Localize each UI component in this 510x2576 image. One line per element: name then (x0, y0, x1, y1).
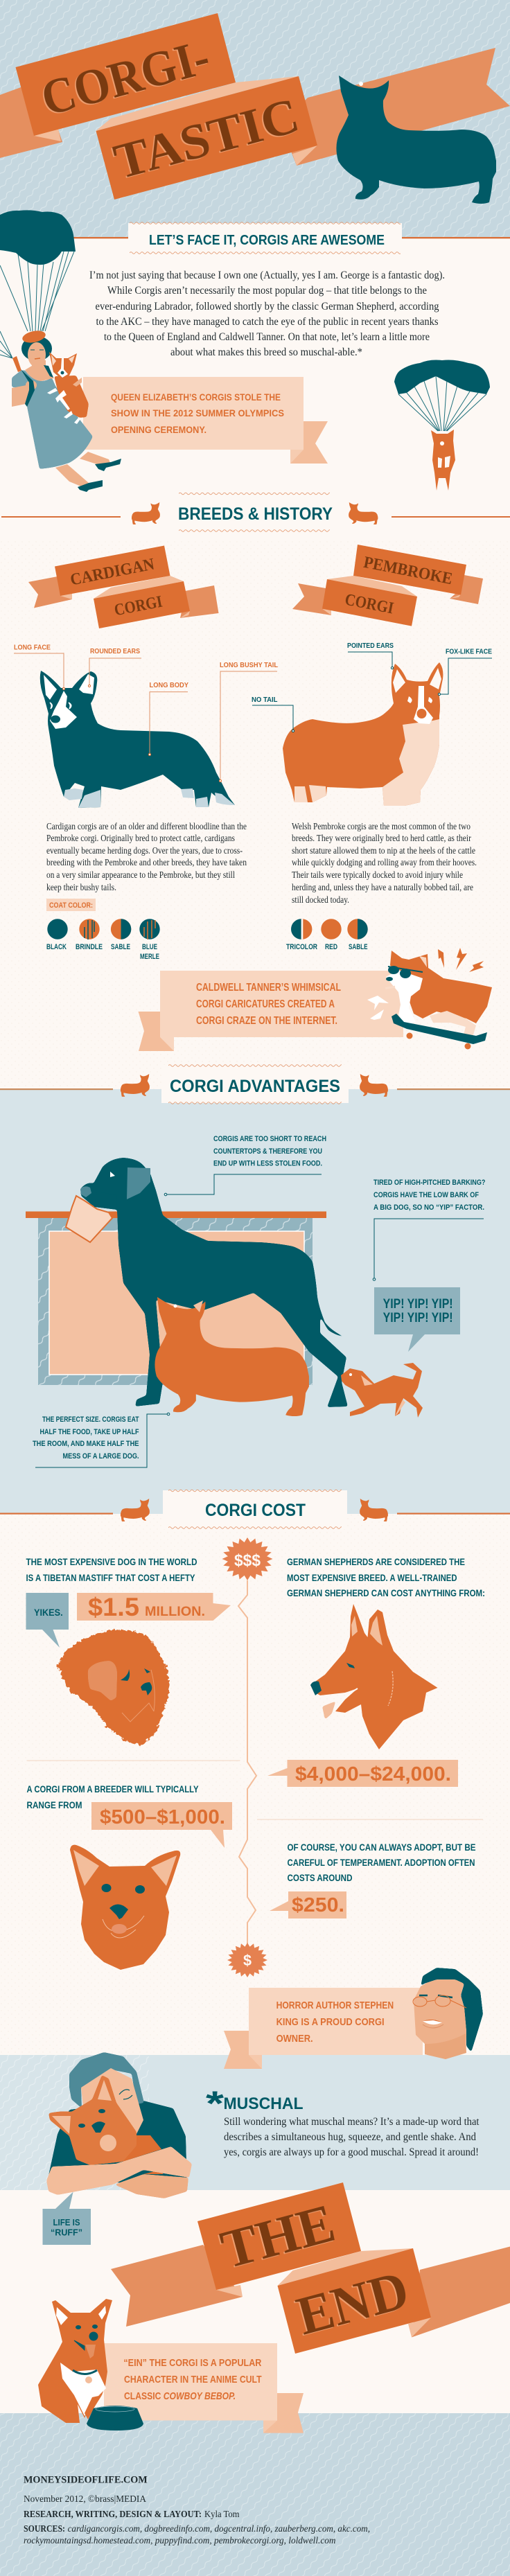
legend: Cardigan coat colors: BLUE (142, 943, 157, 951)
price tag: breeder range: $500–$1,000. (100, 1806, 225, 1828)
text: most expensive dog: THE MOST EXPENSIVE DOG IN THE WORLD (26, 1557, 197, 1567)
speech bubble: life is ruff (43, 2192, 91, 2245)
title word: Tastic: TASTIC (108, 87, 305, 190)
icon: large corgi silhouette (336, 76, 496, 204)
arms (46, 2146, 192, 2198)
callouts: pembroke features: NO TAIL (252, 696, 277, 704)
text: Pembroke description: short stature allowed them to nip at the heels of the cattle (292, 845, 475, 856)
text: corgi from a breeder (26, 1784, 198, 1810)
text: Pembroke description: still docked today. (292, 894, 349, 905)
callout: Caldwell Tanner: CALDWELL TANNER’S WHIMSICAL (196, 982, 341, 994)
callout: stolen food: CORGIS ARE TOO SHORT TO REACH (213, 1135, 326, 1143)
callout: barking: TIRED OF HIGH-PITCHED BARKING? (373, 1179, 486, 1187)
legend: Pembroke coat colors: RED (325, 943, 337, 951)
illustration: Ein the corgi with bowl (38, 2299, 143, 2431)
text: Cardigan description: Pembroke corgi. Originally bred to protect cattle, cardigans (46, 833, 235, 843)
text and illustration: German shepherd (287, 1557, 485, 1749)
callout: perfect size: HALF THE FOOD, TAKE UP HALF (40, 1428, 139, 1436)
callout: Stephen King: KING IS A PROUD CORGI (276, 2016, 385, 2028)
ribbon: Pembroke corgi (292, 545, 483, 626)
arm, straps and head (12, 329, 53, 407)
footer credits: SOURCES: (24, 2523, 65, 2534)
heading: breeds and history: BREEDS & HISTORY (178, 504, 333, 524)
text: Cardigan description: keep their bushy tails. (46, 882, 116, 892)
callout: Ein: “EIN” THE CORGI IS A POPULAR (123, 2357, 262, 2369)
callouts: pembroke features: POINTED EARS (347, 642, 394, 650)
callout: stolen food: COUNTERTOPS & THEREFORE YOU (213, 1147, 322, 1156)
price tag: 1.5 million: MILLION. (145, 1605, 205, 1619)
speech bubble: yikes: YIKES. (34, 1607, 63, 1618)
text: most expensive dog: IS A TIBETAN MASTIFF THAT COST A HEFTY (26, 1573, 195, 1583)
text and tag: adoption: CAREFUL OF TEMPERAMENT. ADOPTION OFTEN (287, 1858, 475, 1868)
intro paragraph: about what makes this breed so muschal-able.* (170, 346, 362, 358)
illustration: kitchen counter (26, 1211, 326, 1385)
intro paragraph: to the AKC – they have managed to catch the eye of the public in recent years thanks (96, 316, 438, 328)
callout: barking (373, 1179, 486, 1280)
heading: corgi advantages (0, 1064, 510, 1104)
callout: perfect size: THE ROOM, AND MAKE HALF THE (33, 1440, 139, 1448)
burst: single dollar: $ (243, 1952, 252, 1969)
callout: barking: A BIG DOG, SO NO “YIP” FACTOR. (373, 1203, 484, 1212)
callouts: cardigan features: ROUNDED EARS (90, 648, 140, 655)
price tag: 1.5 million (77, 1593, 231, 1621)
text and tag: adoption: COSTS AROUND (287, 1873, 353, 1883)
speech bubble: yip: YIP! YIP! YIP! (383, 1297, 453, 1312)
legs and shoes (55, 452, 121, 492)
illustration: corgi parachuting (394, 360, 490, 491)
callout: stolen food: END UP WITH LESS STOLEN FOOD. (213, 1160, 322, 1168)
heading: let's face it (0, 222, 510, 255)
callout: Ein (104, 2343, 304, 2433)
callout: Queen Elizabeth: OPENING CEREMONY. (111, 424, 206, 435)
definition: muschal (206, 2084, 480, 2158)
text and tag: adoption (270, 1842, 475, 1918)
text and illustration: German shepherd: GERMAN SHEPHERDS ARE CONSIDERED THE (287, 1557, 465, 1567)
callout: Stephen King (224, 1988, 423, 2069)
illustration: Queen parachuting with corgi (0, 210, 121, 492)
illustration: barking chihuahua (341, 1363, 423, 1418)
callout: Ein: CHARACTER IN THE ANIME CULT (124, 2374, 262, 2385)
price tag: 250: $250. (292, 1894, 344, 1916)
illustration: skateboarding corgi (367, 948, 492, 1049)
hair and face (69, 2052, 144, 2134)
callouts: pembroke features (252, 642, 492, 732)
intro paragraph (89, 270, 445, 358)
text: Pembroke description (292, 821, 477, 905)
text: Cardigan description: on a very similar appearance to the Pembroke, but they still (46, 870, 235, 880)
legend: Pembroke coat colors (286, 919, 368, 951)
callout: Stephen King: OWNER. (276, 2033, 313, 2045)
text: Cardigan description (46, 821, 247, 892)
illustration: corgi head (70, 1845, 180, 1970)
ribbon: Cardigan corgi: CARDIGAN (69, 555, 157, 589)
text: Pembroke description: Welsh Pembroke corgis are the most common of the two (292, 821, 471, 831)
callout: perfect size (33, 1413, 170, 1467)
legend: Cardigan coat colors: COAT COLOR: (49, 901, 93, 910)
divider lines (26, 1760, 483, 1820)
title banner: Corgi-tastic (0, 13, 510, 200)
callout: Ein: CLASSIC COWBOY BEBOP. (124, 2390, 236, 2402)
neck and chest (25, 360, 54, 382)
intro paragraph: ever-enduring Labrador, followed shortly by the classic German Shepherd, according (96, 301, 439, 312)
callouts: cardigan features: LONG FACE (14, 644, 51, 651)
dress (12, 370, 93, 469)
text and tag: adoption: OF COURSE, YOU CAN ALWAYS ADOPT, BUT BE (287, 1842, 475, 1853)
heading: corgi cost: CORGI COST (205, 1501, 306, 1520)
illustration: Pembroke corgi with labels (252, 642, 492, 806)
intro paragraph: I’m not just saying that because I own one (Actually, yes I am. George is a fantastic dog). (89, 270, 445, 281)
illustration: Stephen King portrait (413, 1968, 483, 2059)
definition: muschal: Still wondering what muschal means? It’s a made-up word that (224, 2116, 480, 2128)
callouts: pembroke features: FOX-LIKE FACE (446, 649, 492, 656)
burst: single dollar (227, 1943, 267, 1977)
footer credits: RESEARCH, WRITING, DESIGN & LAYOUT: (24, 2509, 202, 2519)
ribbon: Pembroke corgi: CORGI (343, 590, 395, 618)
food bowl (87, 2406, 143, 2431)
heading: corgi advantages: CORGI ADVANTAGES (170, 1077, 340, 1096)
price tag: breeder range (91, 1802, 232, 1848)
speech bubble: yip (374, 1287, 460, 1352)
definition: muschal: * (206, 2084, 225, 2123)
heading: let's face it: LET’S FACE IT, CORGIS ARE AWESOME (149, 233, 385, 248)
ribbon: Cardigan corgi (28, 546, 219, 628)
price tag: shepherd range: $4,000–$24,000. (295, 1763, 451, 1785)
speech bubble: life is ruff: LIFE IS (53, 2217, 80, 2227)
dog body (40, 671, 235, 808)
shirt (49, 2101, 187, 2189)
burst: triple dollar: $$$ (234, 1551, 261, 1570)
text: Pembroke description: while quickly dodging and rolling away from their hooves. (292, 857, 477, 867)
legend: Cardigan coat colors: BLACK (46, 943, 67, 951)
legend: Pembroke coat colors: TRICOLOR (286, 943, 317, 951)
price tag: shepherd range (267, 1760, 458, 1787)
callout: Caldwell Tanner: CORGI CRAZE ON THE INTERNET. (196, 1015, 337, 1027)
speech bubble: yip: YIP! YIP! YIP! (383, 1311, 453, 1325)
burst: triple dollar (222, 1537, 273, 1580)
footer credits (24, 2475, 370, 2546)
text: Cardigan description: eventually became herding dogs. Over the years, due to cross- (46, 845, 243, 856)
speech bubble: yikes (26, 1593, 69, 1648)
legend: Cardigan coat colors: MERLE (140, 953, 159, 961)
intro paragraph: While Corgis aren’t necessarily the most popular dog – that title belongs to the (107, 285, 427, 297)
text: Cardigan description: Cardigan corgis are of an older and different bloodline than the (46, 821, 247, 831)
footer credits: November 2012, ©brass|MEDIA (24, 2494, 147, 2505)
callout: Stephen King: HORROR AUTHOR STEPHEN (276, 2000, 394, 2011)
legend: Pembroke coat colors: SABLE (349, 943, 367, 951)
text: Pembroke description: herding and, unless they have a naturally bobbed tail, are (292, 882, 473, 892)
price tag: 250 (270, 1891, 346, 1918)
footer credits: MONEYSIDEOFLIFE.COM (24, 2475, 148, 2486)
backpack cord (12, 356, 21, 372)
timeline: price spine (222, 1537, 273, 1977)
dog body (283, 662, 443, 806)
dog (49, 2075, 161, 2165)
text: Pembroke description: breeds. They were originally bred to herd cattle, as their (292, 833, 471, 843)
footer credits: rockymountaingsd.homestead.com, puppyfind.com, pembrokecorgi.org, loldwell.com (24, 2536, 335, 2546)
callout: perfect size: MESS OF A LARGE DOG. (62, 1452, 139, 1461)
callouts: cardigan features: LONG BUSHY TAIL (220, 662, 278, 669)
legend: Cardigan coat colors (46, 899, 160, 961)
speech bubble: life is ruff: “RUFF” (51, 2227, 82, 2238)
definition: muschal: yes, corgis are always up for a good muschal. Spread it around! (224, 2146, 479, 2158)
callout: Queen Elizabeth: SHOW IN THE 2012 SUMMER OLYMPICS (111, 407, 284, 418)
intro paragraph: to the Queen of England and Caldwell Tanner. On that note, let’s learn a little more (104, 331, 430, 343)
illustration: great dane with bread (66, 1158, 354, 1407)
text and illustration: German shepherd: MOST EXPENSIVE BREED. A WELL-TRAINED (287, 1573, 457, 1583)
text: corgi from a breeder: RANGE FROM (26, 1800, 82, 1810)
illustration: orange corgi looking up (155, 1297, 309, 1416)
legend: Cardigan coat colors: SABLE (111, 943, 130, 951)
parachute canopy and lines (0, 210, 76, 358)
text: Cardigan description: breeding with the Pembroke and other breeds, they have taken (46, 857, 247, 867)
ribbon: Cardigan corgi: CORGI (113, 593, 164, 619)
text: Pembroke description: Their tails were typically docked to avoid injury while (292, 870, 463, 880)
ribbon: Pembroke corgi: PEMBROKE (362, 554, 454, 588)
text: most expensive dog (26, 1557, 197, 1583)
corgi in Queen's arms (47, 352, 89, 424)
legend: Cardigan coat colors: BRINDLE (76, 943, 103, 951)
footer credits: cardigancorgis.com, dogbreedinfo.com, dogcentral.info, zauberberg.com, akc.com, (68, 2524, 370, 2534)
banner: the end (111, 2182, 510, 2354)
heading: corgi cost (0, 1490, 510, 1529)
definition: muschal: MUSCHAL (223, 2094, 304, 2113)
callout: Caldwell Tanner (139, 971, 403, 1051)
illustration: Tibetan mastiff head (57, 1629, 169, 1745)
price tag: 1.5 million: $1.5 (88, 1593, 139, 1621)
callout: perfect size: THE PERFECT SIZE. CORGIS EAT (42, 1415, 139, 1424)
callouts: cardigan features (14, 644, 278, 782)
text: corgi from a breeder: A CORGI FROM A BREEDER WILL TYPICALLY (26, 1784, 198, 1794)
callout: Caldwell Tanner: CORGI CARICATURES CREATED A (196, 998, 335, 1010)
callouts: cardigan features: LONG BODY (150, 682, 188, 689)
banner word: end: END (290, 2259, 414, 2346)
shepherd head (310, 1604, 438, 1749)
illustration: Cardigan corgi with labels (14, 644, 278, 808)
heading: breeds and history (1, 492, 510, 532)
callout: Queen Elizabeth: QUEEN ELIZABETH’S CORGIS STOLE THE (111, 391, 281, 403)
footer credits: Kyla Tom (204, 2509, 240, 2520)
bread slice (66, 1196, 112, 1242)
callout: stolen food (164, 1135, 326, 1196)
banner word: the: THE (215, 2192, 341, 2280)
callout: Queen Elizabeth (83, 377, 328, 464)
callout: barking: CORGIS HAVE THE LOW BARK OF (373, 1191, 479, 1199)
definition: muschal: describes a simultaneous hug, squeeze, and gentle shake. And (224, 2131, 476, 2143)
title word: Corgi-: CORGI- (35, 28, 216, 127)
illustration: person hugging corgi (46, 2052, 192, 2198)
